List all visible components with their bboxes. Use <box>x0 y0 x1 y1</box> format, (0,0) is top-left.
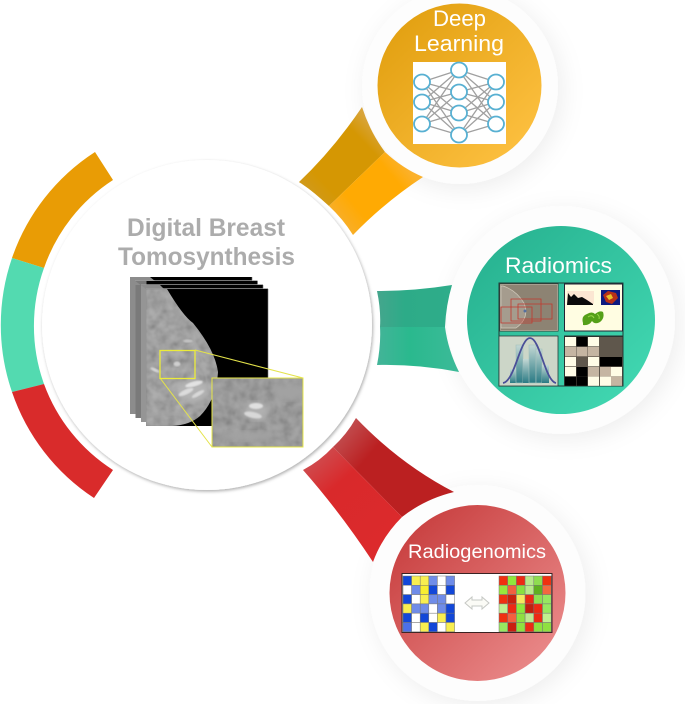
mammogram tile <box>500 284 558 332</box>
ribbon: orange connector <box>298 107 423 235</box>
heading: deep learning <box>414 6 504 56</box>
heading: deep learning: Deep <box>433 6 486 31</box>
title <box>118 214 295 271</box>
title: Digital Breast <box>127 214 286 242</box>
matrix tile <box>564 336 623 386</box>
neural network icon <box>413 62 506 144</box>
title: Tomosynthesis <box>118 243 295 271</box>
ring: deep learning backing <box>362 0 558 184</box>
genomics comparison image <box>402 574 552 632</box>
left arc: teal segment <box>1 258 44 392</box>
panel: deep learning <box>378 4 542 168</box>
image: tomosynthesis stack <box>130 277 308 447</box>
breast image <box>146 289 221 426</box>
heading: deep learning: Learning <box>414 31 504 56</box>
double arrow <box>465 597 489 609</box>
heading: radiogenomics: Radiogenomics <box>408 542 546 563</box>
radiomics image grid <box>499 283 623 386</box>
inset zoom <box>212 378 308 447</box>
ring: radiogenomics backing <box>370 485 586 701</box>
left arc: orange segment <box>12 152 113 268</box>
ring: radiomics backing <box>447 206 675 434</box>
red-green heatmap <box>499 576 551 632</box>
blue heatmap <box>403 576 455 632</box>
yellow zoom lines <box>160 350 303 447</box>
left arc: red segment <box>12 384 113 498</box>
histogram tile <box>499 336 558 386</box>
ribbon: red connector <box>303 418 454 562</box>
yellow selection box <box>160 350 195 378</box>
main circle <box>37 155 377 495</box>
ribbon: teal connector <box>377 285 459 372</box>
panel: radiogenomics <box>390 505 566 681</box>
texture feature tile <box>564 284 623 332</box>
heading: radiomics: Radiomics <box>505 253 612 278</box>
panel: radiomics <box>467 226 655 414</box>
